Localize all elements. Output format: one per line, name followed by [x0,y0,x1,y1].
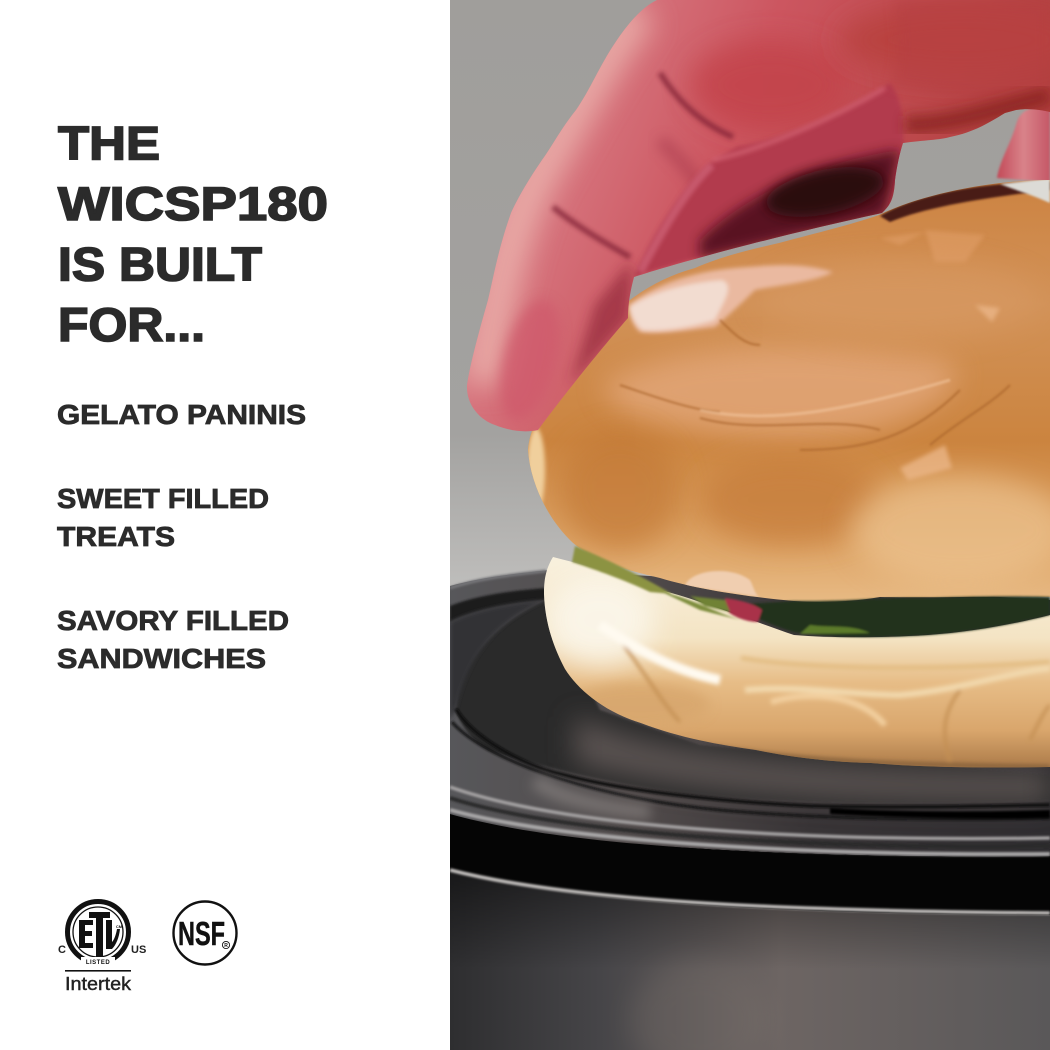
heading: FOR... [58,298,205,351]
heading: IS BUILT [58,238,262,290]
use: sweet filled treats: TREATS [57,521,175,552]
use: sweet filled treats: SWEET FILLED [57,483,269,514]
use: gelato paninis: GELATO PANINIS [57,399,306,430]
use: savory filled sandwiches: SAVORY FILLED [57,605,289,636]
heading: THE [58,116,160,170]
lit outer edge of finger [482,10,640,385]
upper bun [520,175,1050,605]
icon: NSF certification mark [174,902,236,964]
heading [58,116,328,351]
list of uses [57,399,306,674]
press body top highlight [450,870,1050,913]
right background finger [997,108,1050,182]
heading: WICSP180 [58,177,328,230]
sandwich filling [572,546,1050,637]
panel: white text column [0,0,450,1050]
use: sweet filled treats [57,483,269,552]
press dark gap band [450,812,1050,915]
bun wrinkles [620,320,1010,450]
lower bun [540,550,1050,770]
icon: ETL listed Intertek certification mark: US [131,944,146,956]
hand [460,0,1050,440]
icon: NSF certification mark: NSF [178,915,225,952]
icon: ETL listed Intertek certification mark: C [58,944,66,956]
bun white glare [629,265,833,333]
use: savory filled sandwiches: SANDWICHES [57,643,266,674]
use: savory filled sandwiches [57,605,289,674]
icon: NSF certification mark: R [224,943,228,949]
press lid plate [450,570,1050,856]
bun sheen [600,347,956,438]
icon: ETL listed Intertek certification mark: Intertek [65,974,132,994]
finger knuckle creases [553,73,733,257]
icon: ETL listed Intertek certification mark: CM [116,924,123,929]
crumb details [600,625,1050,767]
panini press body [450,870,1050,1050]
photo background [450,0,1050,620]
second finger [634,83,903,277]
icon: ETL listed Intertek certification mark: LISTED [86,960,110,966]
icon: ETL listed Intertek certification mark [58,902,146,994]
photo: hand pressing a burger bun on a panini press [450,0,1050,1050]
